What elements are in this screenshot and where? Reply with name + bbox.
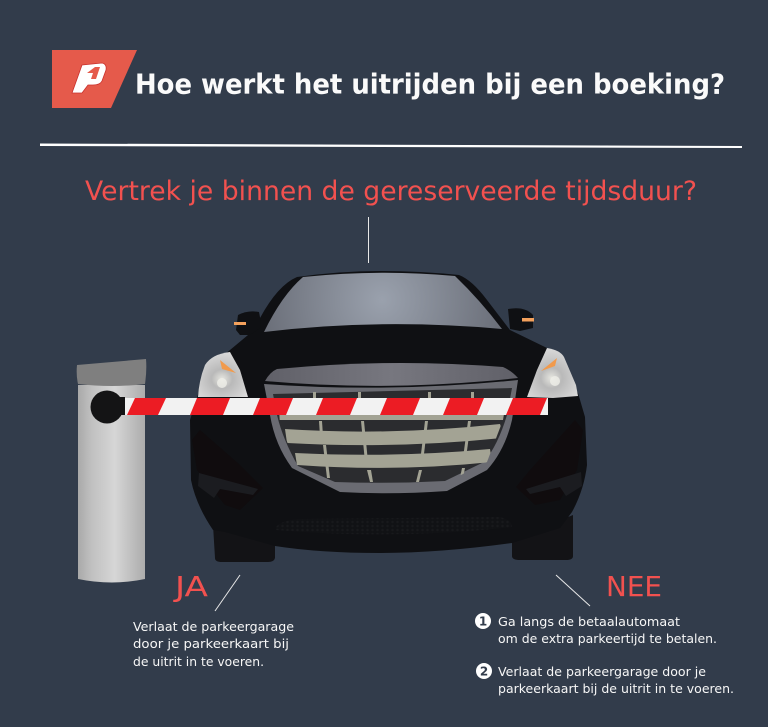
step 2: parkeerkaart bij de uitrit in te voeren. [498, 682, 734, 696]
answer: NEE [475, 570, 734, 696]
step 1: om de extra parkeertijd te betalen. [498, 632, 717, 646]
barrier [77, 359, 548, 582]
fog lamps [192, 420, 583, 510]
tires [213, 515, 573, 562]
answer: NEE: NEE [606, 570, 662, 603]
connector: NEE [556, 575, 590, 606]
step 1: Ga langs de betaalautomaat [498, 615, 680, 629]
JA text: door je parkeerkaart bij [133, 637, 289, 651]
title: Hoe werkt het uitrijden bij een boeking? [135, 68, 725, 100]
step 2 [476, 663, 734, 696]
mirrors [234, 308, 534, 335]
step 1: 1 [479, 614, 487, 628]
lower mesh vent [276, 517, 512, 534]
connector: JA [215, 575, 240, 611]
question heading: Vertrek je binnen de gereserveerde tijdsduur? [85, 176, 697, 207]
JA text: de uitrit in te voeren. [133, 655, 264, 669]
boom arm [124, 398, 548, 415]
step 1 [475, 613, 717, 646]
headlights [198, 348, 578, 398]
step 2: 2 [480, 664, 488, 678]
JA text: Verlaat de parkeergarage [133, 620, 294, 634]
connector: question to car [368, 217, 370, 263]
car body [190, 271, 587, 553]
post cap [77, 359, 146, 386]
answer: JA: JA [173, 570, 208, 603]
step 2: Verlaat de parkeergarage door je [498, 665, 706, 679]
grille [264, 380, 518, 493]
windshield [264, 273, 502, 332]
answer: JA [133, 570, 298, 669]
hood panel [265, 363, 518, 386]
car [190, 271, 587, 562]
post [78, 385, 145, 582]
pivot [90, 390, 125, 424]
logo [52, 50, 137, 108]
